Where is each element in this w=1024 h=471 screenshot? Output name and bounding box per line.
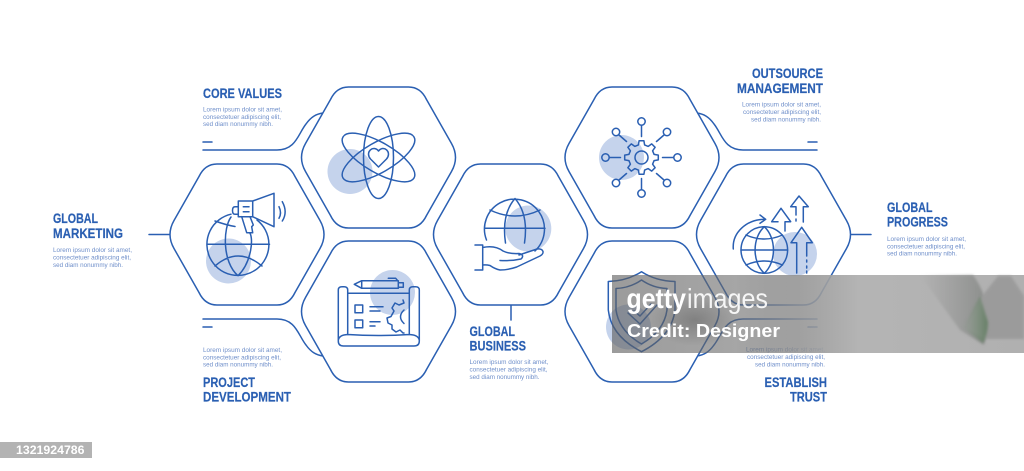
hexagon: establish trust xyxy=(565,241,719,382)
hexagon: global business xyxy=(434,164,588,305)
text: global marketing: consectetuer adipiscing elit, xyxy=(53,254,131,261)
icon: hand holding globe xyxy=(475,198,551,270)
icon: shield with check xyxy=(606,272,675,352)
connector: outsource management xyxy=(697,113,817,150)
text: outsource management: sed diam nonummy nibh. xyxy=(751,116,821,123)
text: global progress: Lorem ipsum dolor sit amet, xyxy=(887,236,966,243)
icon: atom with heart xyxy=(328,116,422,198)
text: global marketing xyxy=(53,211,132,269)
watermark banner: getty xyxy=(626,283,686,314)
hexagon: core values xyxy=(302,87,456,228)
watermark banner xyxy=(612,275,1024,353)
text: global business xyxy=(470,324,549,381)
text: establish trust: sed diam nonummy nibh. xyxy=(755,361,825,368)
connector: global marketing xyxy=(149,234,170,236)
text: global progress: sed diam nonummy nibh. xyxy=(887,251,957,258)
text: core values: consectetuer adipiscing elit, xyxy=(203,114,281,121)
hexagon: project development xyxy=(302,241,456,382)
text: core values: Lorem ipsum dolor sit amet, xyxy=(203,106,282,114)
text: outsource management: MANAGEMENT xyxy=(737,81,824,96)
text: global business: BUSINESS xyxy=(470,338,526,354)
icon: gear network xyxy=(599,118,681,197)
text: project development: consectetuer adipiscing elit, xyxy=(203,354,281,361)
text: outsource management: OUTSOURCE xyxy=(752,66,823,81)
watermark banner: images xyxy=(687,283,768,314)
image id tag xyxy=(0,442,92,458)
connector: global progress xyxy=(851,234,871,236)
text: establish trust xyxy=(746,347,828,405)
text: outsource management: Lorem ipsum dolor sit amet, xyxy=(742,102,821,108)
text: project development xyxy=(203,347,292,404)
text: global progress: PROGRESS xyxy=(887,215,948,230)
text: core values: CORE VALUES xyxy=(203,86,282,101)
text: establish trust: Lorem ipsum dolor sit amet, xyxy=(746,347,825,354)
connector: global business xyxy=(510,305,512,320)
text: project development: PROJECT xyxy=(203,375,256,390)
text: core values: sed diam nonummy nibh. xyxy=(203,121,273,128)
text: global marketing: sed diam nonummy nibh. xyxy=(53,262,123,269)
hexagon: global progress xyxy=(696,164,850,305)
hexagon: outsource management xyxy=(565,87,719,228)
text: project development: DEVELOPMENT xyxy=(203,390,292,404)
text: project development: Lorem ipsum dolor sit amet, xyxy=(203,347,282,354)
text: establish trust: ESTABLISH xyxy=(764,375,827,390)
text: global business: consectetuer adipiscing elit, xyxy=(470,367,548,374)
connector: project development xyxy=(203,319,323,356)
text: core values xyxy=(203,86,282,128)
text: global progress: GLOBAL xyxy=(887,200,932,215)
text: establish trust: TRUST xyxy=(790,390,828,405)
text: global business: GLOBAL xyxy=(470,324,515,339)
text: outsource management: consectetuer adipiscing elit, xyxy=(743,109,821,116)
text: global marketing: MARKETING xyxy=(53,226,123,241)
connector: establish trust xyxy=(697,319,817,356)
text: global marketing: GLOBAL xyxy=(53,211,98,226)
text: global progress xyxy=(887,200,966,258)
text: project development: sed diam nonummy nibh. xyxy=(203,362,273,369)
text: outsource management xyxy=(737,66,824,123)
text: global business: sed diam nonummy nibh. xyxy=(470,374,540,381)
icon: globe with rising arrows xyxy=(733,196,817,276)
text: establish trust: consectetuer adipiscing elit, xyxy=(747,354,825,361)
watermark banner: Credit: Designer xyxy=(627,320,780,341)
text: global progress: consectetuer adipiscing elit, xyxy=(887,243,965,250)
text: global marketing: Lorem ipsum dolor sit amet, xyxy=(53,247,132,254)
image id tag: 1321924786 xyxy=(16,445,84,457)
text: global business: Lorem ipsum dolor sit amet, xyxy=(470,359,549,366)
connector: core values xyxy=(203,113,323,150)
hexagon: global marketing xyxy=(170,164,324,305)
icon: blueprint with pen, checklist and gear xyxy=(338,270,419,346)
icon: globe with megaphone xyxy=(206,193,285,284)
